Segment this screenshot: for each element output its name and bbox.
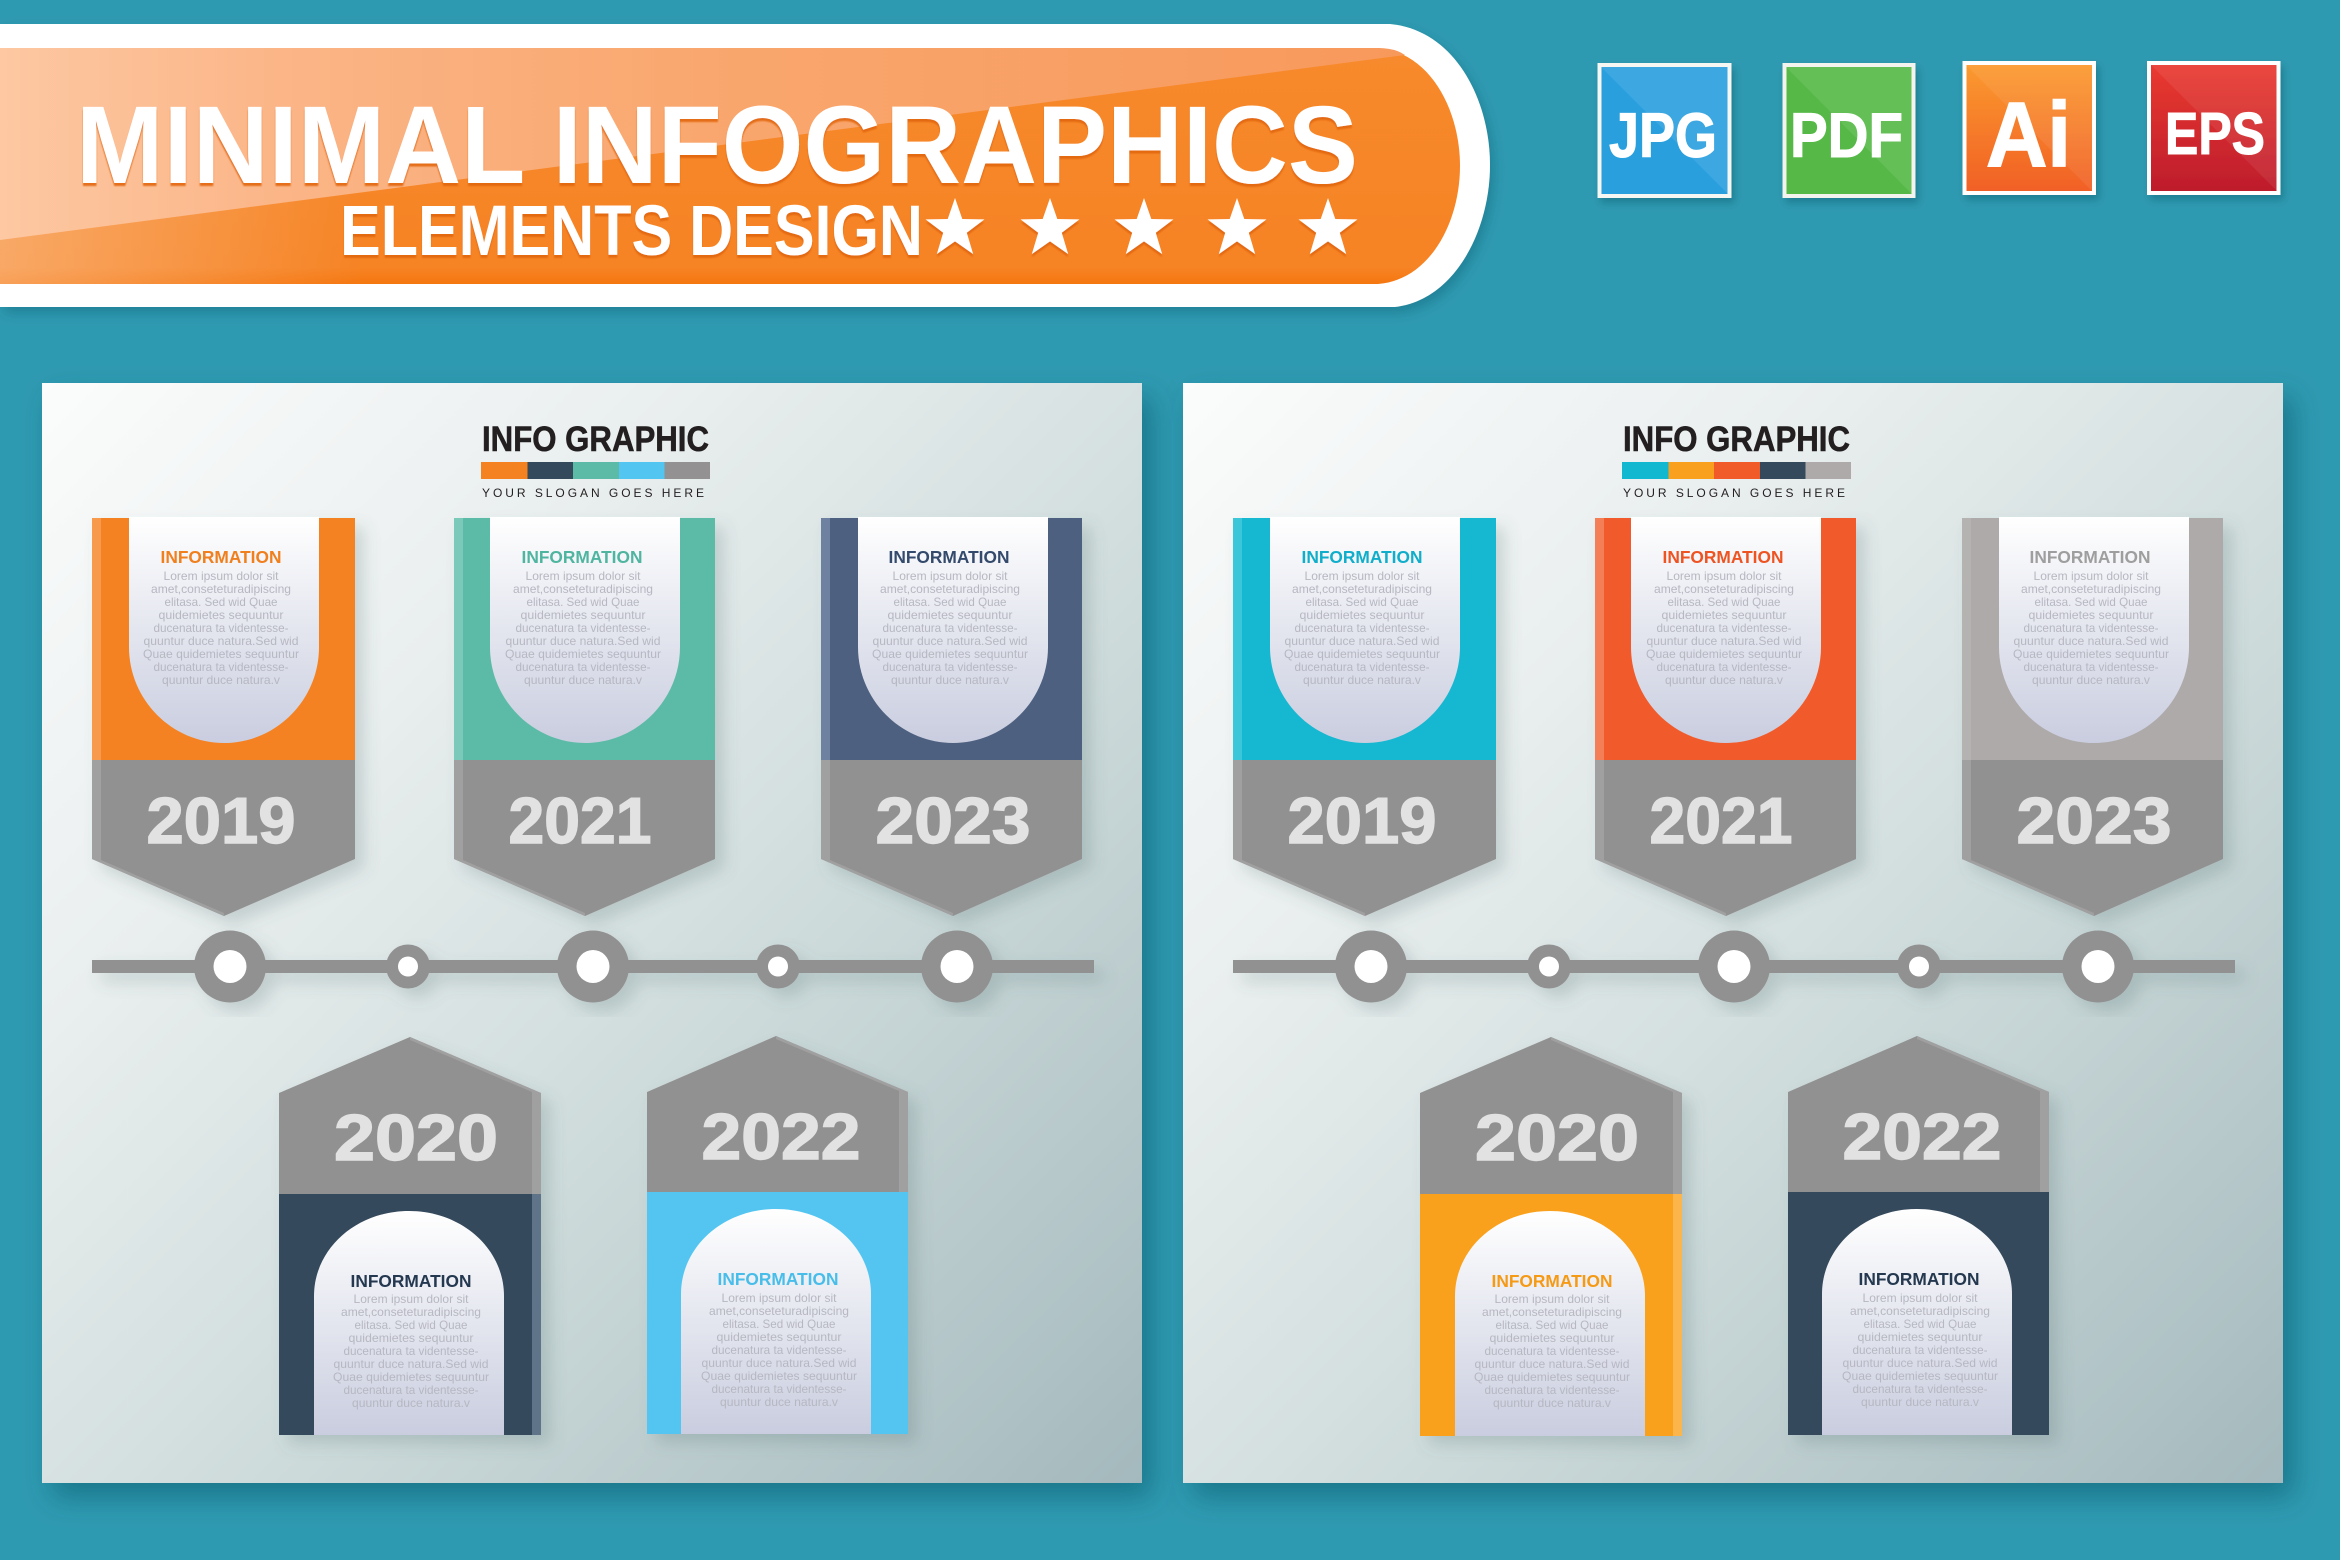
- card: 2019: [1233, 517, 1496, 916]
- colour bar: [481, 462, 710, 479]
- banner left lightening: [0, 48, 1460, 284]
- card: 2023: quidemietes sequuntur: [888, 608, 1012, 622]
- card: 2020: INFORMATION: [350, 1271, 472, 1291]
- card: 2022: ducenatura ta videntesse-: [712, 1343, 846, 1357]
- card: 2022: Quae quidemietes sequuntur: [1842, 1369, 1998, 1383]
- card: 2019: elitasa. Sed wid Quae: [1306, 595, 1419, 609]
- timeline: [92, 930, 1094, 1002]
- card: 2021: quuntur duce natura.v: [1665, 673, 1783, 687]
- card: 2021: Lorem ipsum dolor sit: [526, 569, 641, 583]
- card: 2021: INFORMATION: [522, 547, 642, 567]
- card: 2019: ducenatura ta videntesse-: [1294, 660, 1430, 674]
- card: 2020: 2020: [334, 1101, 498, 1174]
- timeline: [1233, 930, 2235, 1002]
- card: 2021: amet,conseteturadipiscing: [1654, 582, 1794, 596]
- card: 2020: Quae quidemietes sequuntur: [333, 1370, 489, 1384]
- card: 2020: 2020: [1475, 1101, 1639, 1174]
- card: 2023: elitasa. Sed wid Quae: [894, 595, 1007, 609]
- card: 2019: amet,conseteturadipiscing: [1292, 582, 1432, 596]
- card: 2022: [1788, 1036, 2049, 1435]
- card: 2021: Quae quidemietes sequuntur: [505, 647, 661, 661]
- card: 2019: quuntur duce natura.Sed wid: [144, 634, 298, 648]
- card: 2021: Quae quidemietes sequuntur: [1646, 647, 1802, 661]
- card: 2022: 2022: [702, 1100, 860, 1173]
- card: 2020: Quae quidemietes sequuntur: [1474, 1370, 1630, 1384]
- card: 2023: [1962, 517, 2223, 916]
- card: 2022: INFORMATION: [1858, 1269, 1980, 1289]
- card: 2019: Quae quidemietes sequuntur: [143, 647, 299, 661]
- icon: PDF: [1784, 65, 1914, 196]
- colour bar: [1622, 462, 1851, 479]
- card: 2023: ducenatura ta videntesse-: [2024, 660, 2158, 674]
- card: 2023: Lorem ipsum dolor sit: [2034, 569, 2149, 583]
- card: 2021: [454, 517, 715, 916]
- card: 2023: quuntur duce natura.Sed wid: [872, 634, 1028, 648]
- icon: Ai: Ai: [1986, 84, 2071, 186]
- card: 2023: quuntur duce natura.v: [2032, 673, 2150, 687]
- card: 2019: ducenatura ta videntesse-: [154, 660, 288, 674]
- card: 2023: Quae quidemietes sequuntur: [2013, 647, 2169, 661]
- card: 2021: 2021: [508, 784, 652, 857]
- card: 2022: amet,conseteturadipiscing: [709, 1304, 849, 1318]
- card: 2021: quuntur duce natura.Sed wid: [506, 634, 660, 648]
- panel background: [42, 383, 1142, 1483]
- card: 2023: elitasa. Sed wid Quae: [2034, 595, 2148, 609]
- card: 2019: INFORMATION: [160, 547, 282, 567]
- card: 2020: Lorem ipsum dolor sit: [354, 1292, 469, 1306]
- card: 2021: ducenatura ta videntesse-: [1656, 660, 1792, 674]
- card: 2020: amet,conseteturadipiscing: [341, 1305, 481, 1319]
- card: 2019: quuntur duce natura.Sed wid: [1284, 634, 1440, 648]
- card: 2023: Quae quidemietes sequuntur: [872, 647, 1028, 661]
- banner white outline: [0, 24, 1490, 307]
- banner title: MINIMAL INFOGRAPHICS: [76, 84, 1358, 207]
- card: 2021: ducenatura ta videntesse-: [516, 621, 650, 635]
- card: 2023: amet,conseteturadipiscing: [880, 582, 1020, 596]
- card: 2022: quuntur duce natura.Sed wid: [1842, 1356, 1998, 1370]
- card: 2019: INFORMATION: [1302, 547, 1422, 567]
- card: 2020: ducenatura ta videntesse-: [1484, 1344, 1620, 1358]
- card: 2021: amet,conseteturadipiscing: [513, 582, 653, 596]
- rating stars: [926, 198, 1358, 254]
- card: 2019: Lorem ipsum dolor sit: [1304, 569, 1420, 583]
- card: 2019: 2019: [1288, 784, 1436, 857]
- card: 2020: quuntur duce natura.Sed wid: [334, 1357, 488, 1371]
- card: 2021: [1595, 517, 1856, 916]
- card: 2019: quidemietes sequuntur: [1300, 608, 1424, 622]
- slogan: YOUR SLOGAN GOES HERE: [1623, 486, 1845, 500]
- card: 2020: ducenatura ta videntesse-: [1484, 1383, 1620, 1397]
- card: 2020: Lorem ipsum dolor sit: [1494, 1292, 1610, 1306]
- card: 2023: quidemietes sequuntur: [2028, 608, 2154, 622]
- icon: EPS: [2149, 63, 2278, 193]
- card: 2023: ducenatura ta videntesse-: [882, 621, 1018, 635]
- card: 2022: 2022: [1842, 1100, 2002, 1173]
- card: 2020: elitasa. Sed wid Quae: [354, 1318, 468, 1332]
- card: 2021: quidemietes sequuntur: [520, 608, 646, 622]
- card: 2020: quuntur duce natura.v: [1493, 1396, 1611, 1410]
- card: 2021: elitasa. Sed wid Quae: [1668, 595, 1781, 609]
- card: 2022: quuntur duce natura.v: [1861, 1395, 1979, 1409]
- card: 2022: elitasa. Sed wid Quae: [722, 1317, 836, 1331]
- card: 2020: [279, 1037, 541, 1435]
- card: 2022: ducenatura ta videntesse-: [1852, 1382, 1988, 1396]
- card: 2022: [647, 1036, 908, 1434]
- card: 2022: Quae quidemietes sequuntur: [701, 1369, 857, 1383]
- card: 2021: quuntur duce natura.v: [524, 673, 642, 687]
- heading: INFO GRAPHIC: [1623, 420, 1850, 459]
- card: 2023: ducenatura ta videntesse-: [2024, 621, 2158, 635]
- panel: right timeline: [1183, 383, 2283, 1483]
- card: 2022: Lorem ipsum dolor sit: [722, 1291, 837, 1305]
- card: 2022: Lorem ipsum dolor sit: [1862, 1291, 1978, 1305]
- card: 2022: quuntur duce natura.Sed wid: [702, 1356, 856, 1370]
- card: 2022: amet,conseteturadipiscing: [1850, 1304, 1990, 1318]
- card: 2023: 2023: [876, 784, 1030, 857]
- icon: JPG: JPG: [1609, 101, 1717, 171]
- card: 2020: INFORMATION: [1492, 1271, 1612, 1291]
- card: 2019: quidemietes sequuntur: [158, 608, 284, 622]
- card: 2022: quidemietes sequuntur: [716, 1330, 842, 1344]
- card: 2020: [1420, 1037, 1682, 1436]
- card: 2022: ducenatura ta videntesse-: [1852, 1343, 1988, 1357]
- card: 2021: ducenatura ta videntesse-: [516, 660, 650, 674]
- card: 2023: 2023: [2016, 784, 2172, 857]
- icon: JPG: [1600, 65, 1730, 196]
- banner orange body: [0, 48, 1460, 284]
- card: 2021: Lorem ipsum dolor sit: [1666, 569, 1782, 583]
- card: 2023: [821, 517, 1082, 916]
- heading: [481, 420, 710, 500]
- card: 2022: quuntur duce natura.v: [720, 1395, 838, 1409]
- card: 2021: 2021: [1650, 784, 1792, 857]
- card: 2021: INFORMATION: [1662, 547, 1784, 567]
- slogan: YOUR SLOGAN GOES HERE: [482, 486, 704, 500]
- card: 2023: quuntur duce natura.v: [891, 673, 1009, 687]
- panel: left timeline: [42, 383, 1142, 1483]
- card: 2023: amet,conseteturadipiscing: [2021, 582, 2161, 596]
- card: 2019: Lorem ipsum dolor sit: [164, 569, 279, 583]
- card: 2021: quuntur duce natura.Sed wid: [1646, 634, 1802, 648]
- icon: EPS: EPS: [2165, 101, 2265, 167]
- banner subtitle: ELEMENTS DESIGN: [340, 192, 923, 271]
- card: 2021: elitasa. Sed wid Quae: [526, 595, 640, 609]
- card: 2019: Quae quidemietes sequuntur: [1284, 647, 1440, 661]
- panel background: [1183, 383, 2283, 1483]
- card: 2021: ducenatura ta videntesse-: [1656, 621, 1792, 635]
- header banner: [0, 24, 1490, 307]
- banner gloss: [0, 48, 1405, 240]
- card: 2022: quidemietes sequuntur: [1858, 1330, 1982, 1344]
- icon: Ai: [1964, 63, 2094, 193]
- card: 2019: elitasa. Sed wid Quae: [164, 595, 278, 609]
- card: 2023: INFORMATION: [2030, 547, 2150, 567]
- card: 2019: 2019: [146, 784, 296, 857]
- card: 2023: ducenatura ta videntesse-: [882, 660, 1018, 674]
- card: 2019: [92, 517, 355, 916]
- icon: PDF: PDF: [1790, 101, 1903, 171]
- card: 2019: quuntur duce natura.v: [1303, 673, 1421, 687]
- card: 2019: amet,conseteturadipiscing: [151, 582, 291, 596]
- card: 2019: ducenatura ta videntesse-: [1294, 621, 1430, 635]
- card: 2020: elitasa. Sed wid Quae: [1496, 1318, 1609, 1332]
- card: 2019: ducenatura ta videntesse-: [154, 621, 288, 635]
- heading: [1622, 420, 1851, 500]
- card: 2022: elitasa. Sed wid Quae: [1864, 1317, 1977, 1331]
- card: 2020: quuntur duce natura.v: [352, 1396, 470, 1410]
- card: 2020: amet,conseteturadipiscing: [1482, 1305, 1622, 1319]
- card: 2019: quuntur duce natura.v: [162, 673, 280, 687]
- card: 2020: ducenatura ta videntesse-: [344, 1344, 478, 1358]
- card: 2022: INFORMATION: [718, 1269, 838, 1289]
- card: 2020: quidemietes sequuntur: [348, 1331, 474, 1345]
- card: 2020: quuntur duce natura.Sed wid: [1474, 1357, 1630, 1371]
- card: 2020: quidemietes sequuntur: [1490, 1331, 1614, 1345]
- card: 2023: INFORMATION: [888, 547, 1010, 567]
- card: 2021: quidemietes sequuntur: [1662, 608, 1786, 622]
- card: 2020: ducenatura ta videntesse-: [344, 1383, 478, 1397]
- card: 2023: quuntur duce natura.Sed wid: [2014, 634, 2168, 648]
- card: 2023: Lorem ipsum dolor sit: [892, 569, 1008, 583]
- heading: INFO GRAPHIC: [482, 420, 709, 459]
- card: 2022: ducenatura ta videntesse-: [712, 1382, 846, 1396]
